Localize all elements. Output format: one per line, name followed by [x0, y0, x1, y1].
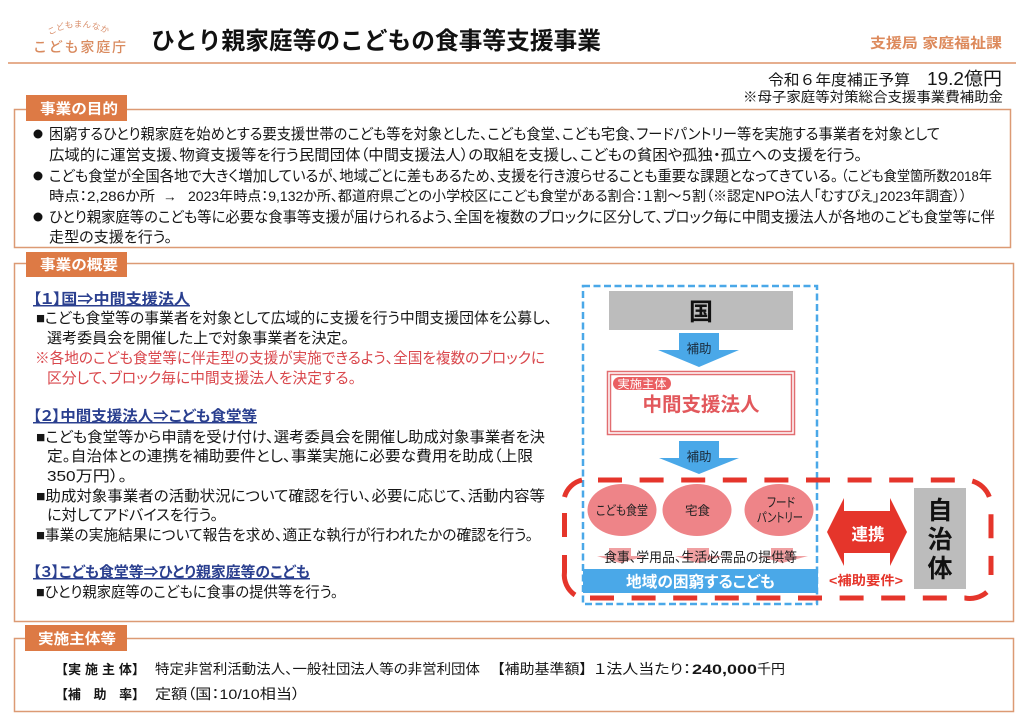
- arrow: 補助 2: [659, 441, 739, 474]
- section 2: ■助成対象事業者の活動状況について確認を行い、必要に応じて、活動内容等: [36, 487, 545, 505]
- ellipse: フードパントリー: パントリー: [757, 510, 803, 525]
- red dashed frame: [564, 480, 991, 598]
- label: 補助要件: <補助要件>: [829, 573, 903, 588]
- bullet 1: [34, 130, 42, 138]
- budget amount: [768, 69, 1002, 89]
- row: 実施主体: 240,000: [692, 661, 757, 677]
- ellipse: こども食堂: こども食堂: [596, 503, 648, 518]
- bar: 地域の困窮するこども: 地域の困窮するこども: [626, 572, 775, 591]
- purpose text 2: 時点：2,286か所: [49, 188, 155, 204]
- row: 実施主体: １法人当たり：: [594, 661, 691, 677]
- row: 実施主体: [55, 661, 785, 677]
- ellipse: 宅食: 宅食: [685, 504, 710, 518]
- purpose text 2: [49, 168, 992, 204]
- tag: 実施主体: 実施主体: [618, 377, 667, 391]
- small arrows: [597, 548, 808, 563]
- diagram: support flow: [564, 286, 991, 604]
- bar: 地域の困窮するこども: [583, 569, 818, 593]
- heading: 事業の概要: 事業の概要: [40, 256, 118, 274]
- panel: overview: [14, 252, 1014, 622]
- section 1: 選考委員会を開催した上で対象事業者を決定。: [47, 330, 349, 347]
- ellipse: フードパントリー: フード: [767, 495, 795, 510]
- section 2: ■こども食堂等から申請を受け付け、選考委員会を開催し助成対象事業者を決: [36, 428, 545, 446]
- section 1: 【１】国⇒中間支援法人: [33, 290, 190, 308]
- heading: 事業の目的: 事業の目的: [40, 100, 118, 118]
- panel: implementing body: [14, 625, 1014, 712]
- arrow: 補助 1: 補助: [686, 342, 712, 356]
- panel: purpose: [14, 95, 1010, 248]
- purpose text 3: 走型の支援を行う。: [49, 229, 172, 246]
- section 2: [33, 407, 545, 544]
- bullet 2: [34, 172, 42, 180]
- row: 実施主体: 【実 施 主 体】: [55, 662, 145, 677]
- section 3: [33, 563, 338, 601]
- box: 自治体: 体: [927, 555, 953, 583]
- heading: 事業の概要: [26, 252, 127, 277]
- box: 国: [609, 291, 793, 330]
- box: 自治体: 自: [927, 497, 953, 525]
- box: 自治体: [914, 488, 966, 589]
- purpose text 2: →: [163, 189, 177, 204]
- department name: 支援局 家庭福祉課: [870, 35, 1002, 51]
- logo: こども家庭庁: こどもまんなか: [48, 20, 108, 34]
- row: 実施主体: 【補助基準額】: [497, 661, 587, 677]
- tag: 実施主体: [613, 377, 671, 391]
- section 3: ■ひとり親家庭等のこどもに食事の提供等を行う。: [36, 583, 338, 601]
- logo: こども家庭庁: [33, 20, 126, 55]
- logo: こども家庭庁: こども家庭庁: [33, 39, 126, 55]
- budget note: ※母子家庭等対策総合支援事業費補助金: [743, 89, 1003, 105]
- purpose text 3: ひとり親家庭等のこども等に必要な食事等支援が届けられるよう、全国を複数のブロックに区分して、ブロック毎に中間支援法人が各地のこども食堂等に伴: [49, 208, 995, 226]
- purpose text 3: [49, 208, 995, 246]
- bullet 3: [34, 212, 42, 222]
- row: 実施主体: 千円: [757, 661, 785, 677]
- purpose text 2: こども食堂が全国各地で大きく増加しているが、地域ごとに差もあるため、支援を行き渡らせることも重要な課題となってきている。: [49, 168, 838, 185]
- section 2: に対してアドバイスを行う。: [47, 507, 218, 524]
- row: 実施主体: 特定非営利活動法人、一般社団法人等の非営利団体: [155, 661, 480, 677]
- box: 自治体: 治: [927, 526, 953, 554]
- blue dashed frame: [583, 286, 817, 604]
- ellipse: 宅食: [662, 484, 732, 536]
- purpose text 2: （こども食堂箇所数2018年: [841, 168, 992, 184]
- purpose text 1: 困窮するひとり親家庭を始めとする要支援世帯のこども等を対象とした、こども食堂、こども宅食、フードパントリー等を実施する事業者を対象として: [49, 125, 940, 143]
- box: 国: 国: [689, 299, 713, 326]
- arrow: 補助 2: 補助: [686, 450, 712, 464]
- ellipse: こども食堂: [588, 484, 656, 536]
- section 1: ■こども食堂等の事業者を対象として広域的に支援を行う中間支援団体を公募し、: [36, 309, 552, 327]
- box: 中間支援法人: 中間支援法人: [642, 394, 760, 416]
- arrow: 補助 1: [658, 333, 739, 367]
- purpose text 2: 2023年時点：9,132か所、都道府県ごとの小学校区にこども食堂がある割合：１割～５割（※認定NPO法人「むすびえ」2023年調査））: [188, 188, 967, 204]
- section 1: [33, 290, 552, 387]
- heading: 実施主体等: [25, 625, 127, 651]
- heading: 事業の目的: [26, 95, 127, 121]
- section 1: ※各地のこども食堂等に伴走型の支援が実施できるよう、全国を複数のブロックに: [35, 349, 545, 367]
- arrow: 連携: 連携: [852, 525, 884, 544]
- purpose text 1: [49, 125, 940, 164]
- row: 補助率: [55, 686, 300, 702]
- section 3: 【３】こども食堂等⇒ひとり親家庭等のこども: [33, 563, 310, 581]
- row: 補助率: 定額（国：10/10相当）: [155, 686, 300, 702]
- budget amount: 令和６年度補正予算: [768, 71, 910, 89]
- section 1: 区分して、ブロック毎に中間支援法人を決定する。: [47, 369, 356, 387]
- row: 補助率: 【補 助 率】: [55, 687, 145, 702]
- title: ひとり親家庭等のこどもの食事等支援事業: [151, 28, 601, 55]
- section 2: 350万円）。: [47, 468, 127, 485]
- box: 中間支援法人: [608, 372, 794, 434]
- section 2: 定。自治体との連携を補助要件とし、事業実施に必要な費用を助成（上限: [47, 448, 533, 465]
- text: 提供: 食事、学用品、生活必需品の提供等: [604, 549, 797, 565]
- arrow: 連携: [827, 498, 907, 566]
- purpose text 1: 広域的に運営支援、物資支援等を行う民間団体（中間支援法人）の取組を支援し、こどもの貧困や孤独・孤立への支援を行う。: [49, 146, 862, 164]
- ellipse: フードパントリー: [744, 484, 814, 536]
- section 2: 【２】中間支援法人⇒こども食堂等: [33, 407, 257, 425]
- section 2: ■事業の実施結果について報告を求め、適正な執行が行われたかの確認を行う。: [36, 527, 533, 544]
- heading: 実施主体等: 実施主体等: [38, 630, 116, 648]
- budget amount: 19.2億円: [927, 69, 1002, 89]
